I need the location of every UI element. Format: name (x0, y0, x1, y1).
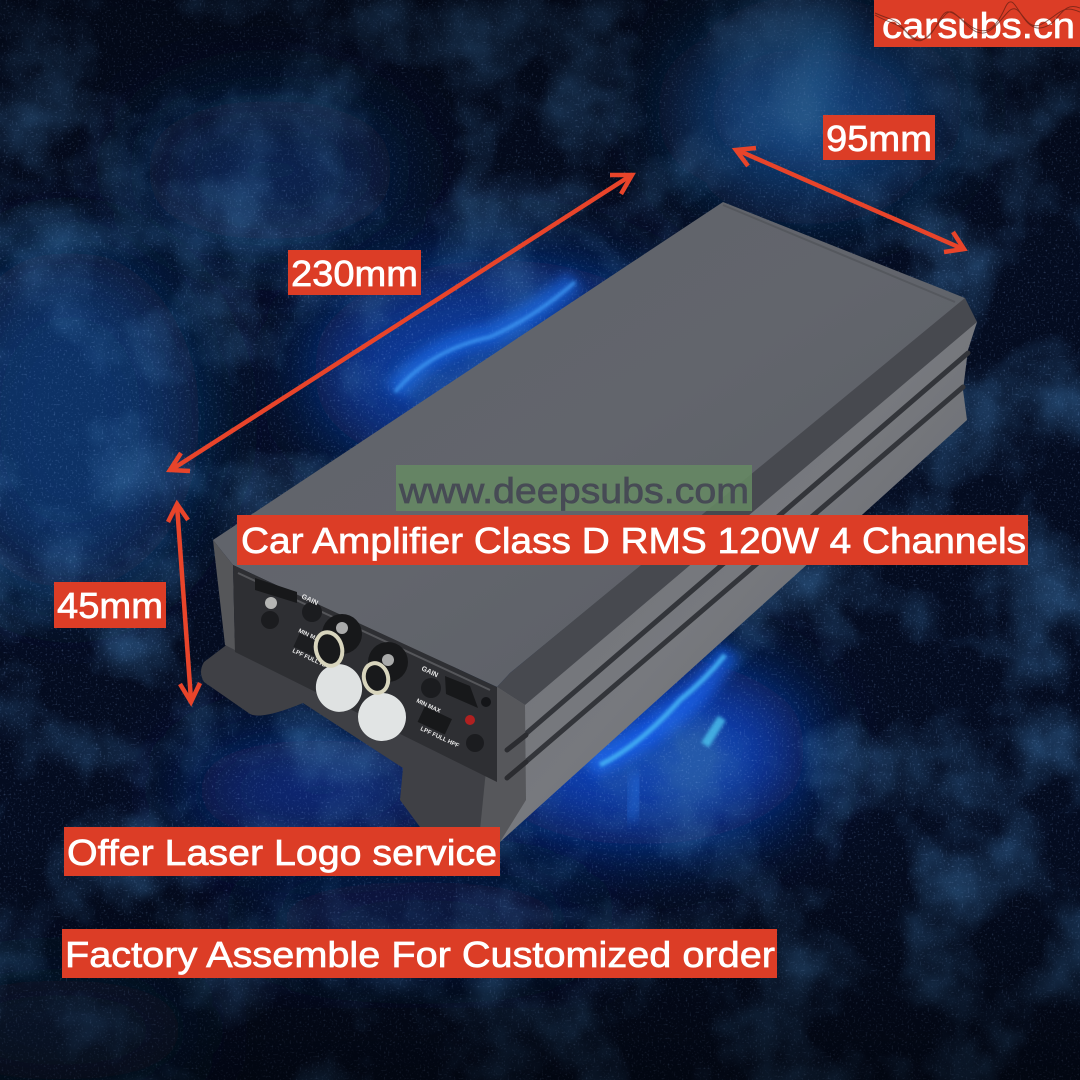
amplifier left end (213, 540, 235, 650)
amplifier chamfered edge (497, 298, 977, 705)
panel microtext: GAIN (300, 593, 319, 607)
amplifier product image (201, 202, 977, 842)
gain knobs (261, 611, 279, 629)
RCA sockets (322, 614, 362, 654)
dimension arrow: 95mm width (736, 148, 964, 252)
amplifier side panel (497, 302, 977, 842)
label: carsubs.cn: carsubs.cn (882, 5, 1075, 46)
panel microtext: GAIN (420, 665, 439, 679)
amplifier top cover (213, 202, 965, 687)
panel microtext (291, 593, 460, 750)
dimension arrow: 230mm length (170, 175, 632, 471)
white RCA plugs (309, 629, 413, 748)
panel microtext: MIN MAX (297, 628, 323, 645)
label: 45mm: 45mm (57, 585, 163, 626)
label: laser logo service: Offer Laser Logo service (67, 832, 497, 873)
panel microtext: MIN MAX (415, 698, 441, 715)
switches (418, 706, 452, 734)
dimension arrow: 45mm height (168, 504, 200, 702)
label: 95mm: 95mm (826, 118, 932, 159)
power connector (255, 578, 297, 603)
screw (481, 697, 491, 707)
red LED (465, 715, 475, 725)
amplifier front corner (480, 687, 526, 842)
watermark: www.deepsubs.com: www.deepsubs.com (398, 470, 749, 511)
panel microtext: LPF FULL HPF (291, 648, 332, 672)
amplifier control panel (233, 565, 497, 782)
label: factory assemble: Factory Assemble For Customized order (65, 934, 775, 975)
amplifier mounting feet (201, 560, 520, 842)
label: 230mm: 230mm (291, 253, 418, 294)
amplifier grooves (507, 353, 968, 778)
panel microtext: LPF FULL HPF (419, 726, 460, 750)
title: car amplifier: Car Amplifier Class D RMS 120W 4 Channels (241, 520, 1026, 561)
